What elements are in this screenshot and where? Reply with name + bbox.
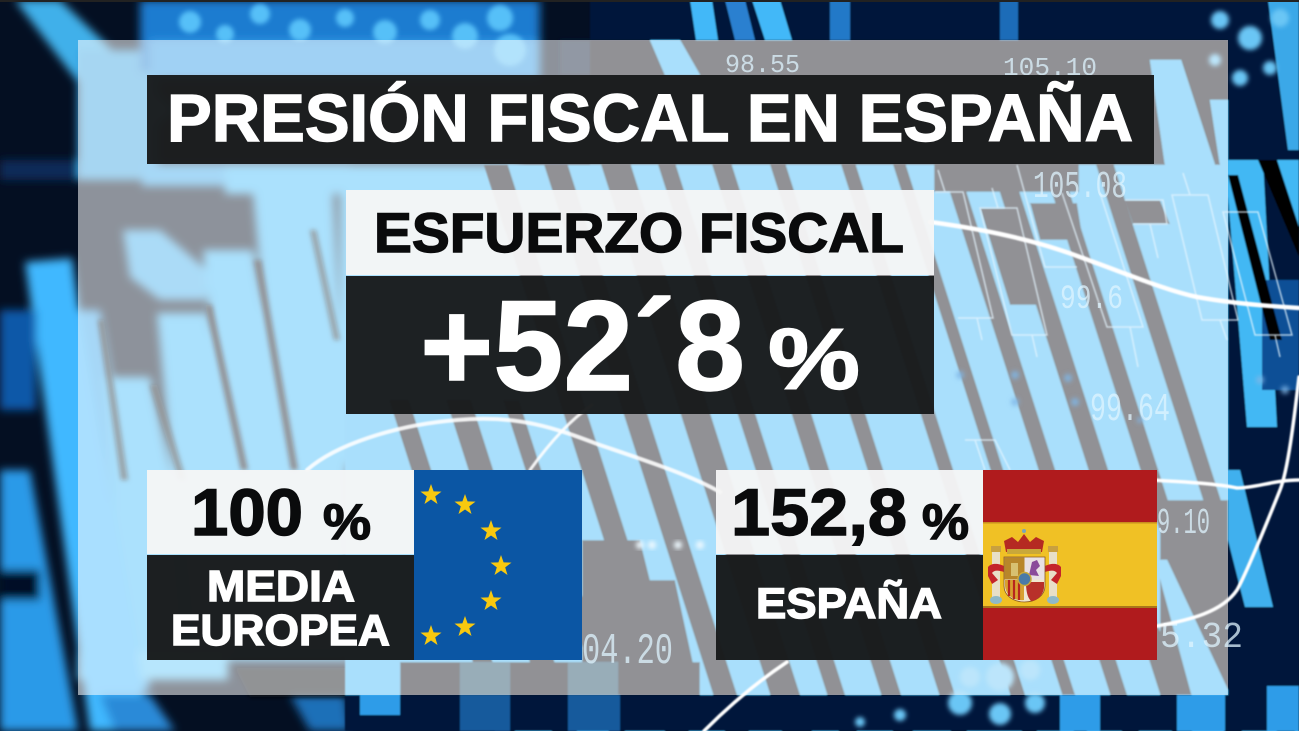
- esfuerzo fiscal heading: ESFUERZO FISCAL: [374, 201, 904, 264]
- chart figures: 105.10: [1003, 53, 1097, 83]
- esfuerzo fiscal value: +52´8: [420, 275, 745, 418]
- icon: EU flag: [414, 470, 582, 660]
- panel: media europea: [147, 470, 582, 660]
- translucent panel: [78, 40, 1228, 695]
- icon: coat of arms: [988, 529, 1061, 604]
- value 100 %: %: [323, 494, 371, 550]
- panel: esfuerzo fiscal: [346, 190, 934, 418]
- value 152,8 %: 152,8: [731, 475, 907, 549]
- chart figures: 105.08: [1033, 166, 1127, 209]
- chart figures: 04.20: [582, 627, 673, 677]
- title bar: [147, 75, 1154, 164]
- value 152,8 %: [731, 475, 969, 550]
- chart figures: 9.10: [1157, 503, 1210, 544]
- panel: españa: [716, 470, 1157, 660]
- chart figures: 98.55: [725, 50, 800, 80]
- icon: Spanish flag: [983, 470, 1157, 660]
- chart figures: [582, 50, 1243, 677]
- label media europea: MEDIA: [207, 562, 355, 611]
- label media europea: EUROPEA: [171, 606, 390, 655]
- title text: PRESIÓN FISCAL EN ESPAÑA: [167, 81, 1133, 156]
- label media europea: [171, 562, 390, 655]
- chart figures: 99.64: [1090, 388, 1170, 433]
- chart figures: 99.6: [1060, 281, 1123, 319]
- esfuerzo fiscal value: %: [768, 312, 860, 408]
- value 100 %: 100: [191, 475, 303, 549]
- chart figures: 5.32: [1160, 617, 1243, 658]
- value 152,8 %: %: [922, 494, 969, 550]
- value 100 %: [191, 475, 371, 550]
- label españa: ESPAÑA: [756, 580, 942, 628]
- chart overlay: candlesticks, figures and trend lines: [307, 50, 1299, 731]
